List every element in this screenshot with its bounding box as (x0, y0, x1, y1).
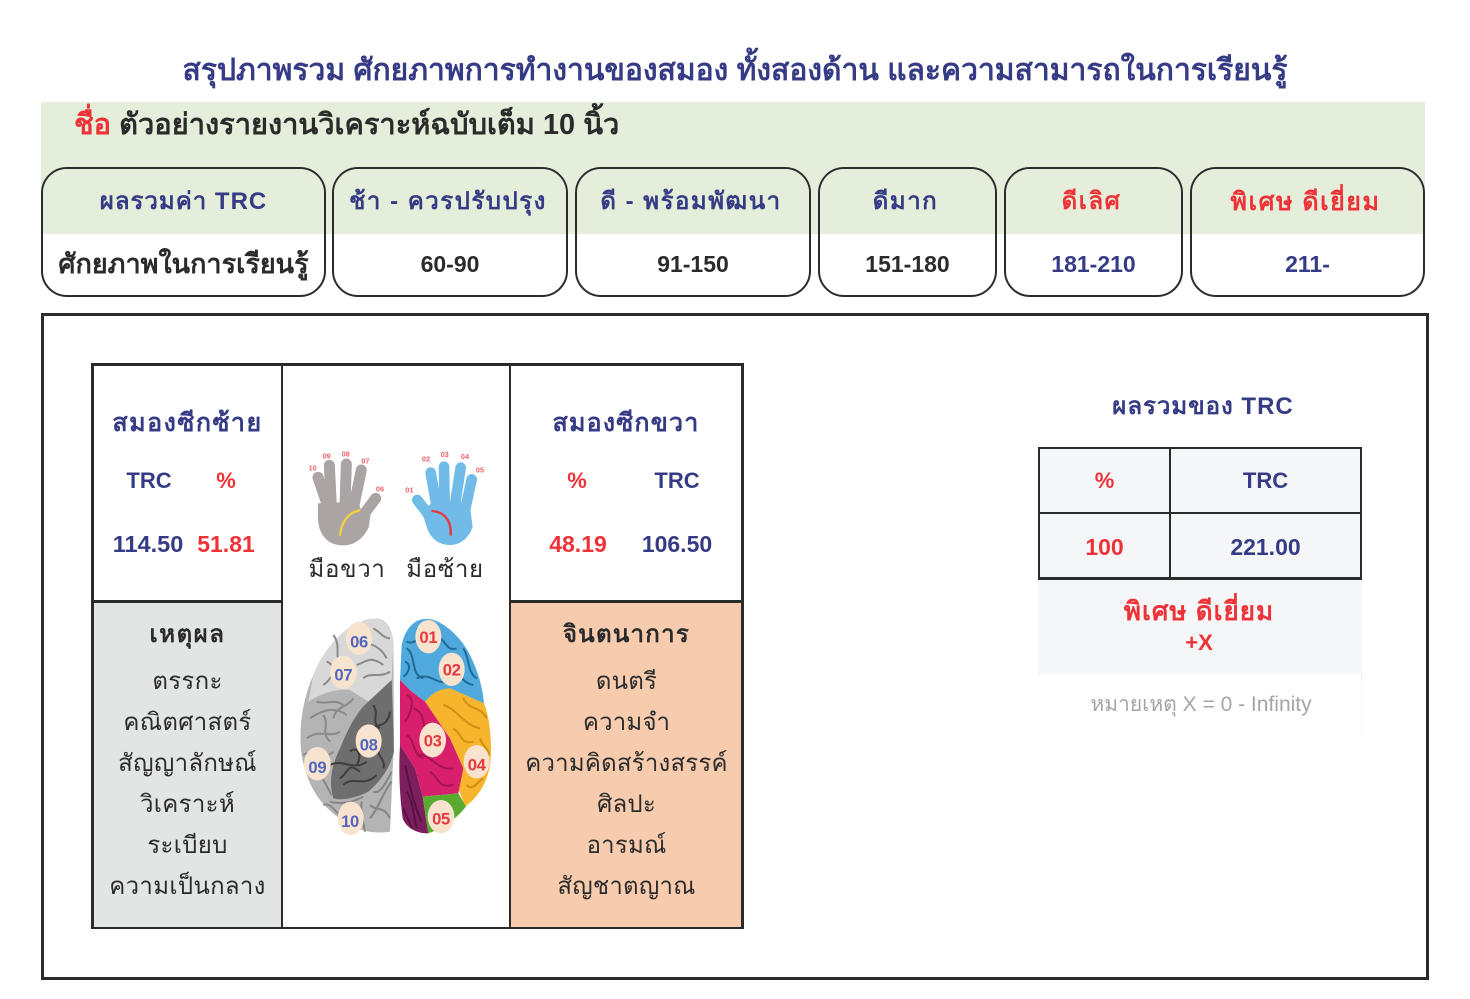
card: good (575, 167, 811, 297)
imagination list (525, 621, 728, 900)
card: very good: ดีมาก (873, 188, 938, 215)
logic heading: เหตุผล (150, 621, 225, 648)
brain number badges: 01 (419, 628, 437, 647)
left TRC label: TRC (126, 468, 172, 493)
card: very good: 151-180 (865, 251, 950, 277)
left brain heading: สมองซีกซ้าย (112, 409, 263, 437)
icon: left hand: 05 (476, 465, 484, 474)
card: good: 91-150 (657, 251, 729, 277)
brain number badges: 02 (443, 660, 461, 679)
logic items: ตรรกะ (152, 668, 223, 695)
brain number badges (304, 620, 490, 835)
TRC label: TRC (1243, 468, 1288, 493)
icon: left hand: 03 (441, 450, 449, 459)
logic list (109, 621, 266, 900)
imagination items: ความคิดสร้างสรรค์ (525, 750, 728, 777)
card: total TRC: ศักยภาพในการเรียนรู้ (58, 249, 309, 279)
brain number badges: 05 (432, 810, 450, 829)
icon: right hand (309, 450, 384, 545)
hand label: right: มือขวา (308, 556, 386, 583)
main panel (41, 313, 1429, 980)
card: good: ดี - พร้อมพัฒนา (600, 188, 782, 215)
icon: left hand: 04 (461, 452, 470, 461)
logic panel (94, 602, 281, 927)
brain number badges: 09 (308, 758, 326, 777)
footnote edge (1361, 674, 1362, 736)
icon: left hand: 01 (405, 486, 413, 495)
right brain heading: สมองซีกขวา (552, 409, 700, 437)
card: excellent: ดีเลิศ (1062, 188, 1121, 215)
card: slow: 60-90 (421, 251, 479, 277)
card: total TRC (41, 167, 326, 297)
hand label: left: มือซ้าย (406, 556, 484, 583)
total table (1038, 447, 1362, 580)
card: slow (332, 167, 568, 297)
imagination items: ความจำ (583, 709, 670, 736)
percent total: 100 (1085, 534, 1124, 560)
brain right hemisphere (399, 619, 491, 833)
right percent label: % (567, 468, 587, 493)
logic items: ความเป็นกลาง (109, 873, 266, 900)
logic items: คณิตศาสตร์ (123, 709, 252, 736)
icon: right hand: 08 (342, 450, 350, 459)
imagination items: ศิลปะ (597, 791, 656, 818)
header band (41, 102, 1425, 234)
result text: พิเศษ ดีเยี่ยม (1124, 596, 1274, 626)
card: special: 211- (1285, 251, 1330, 277)
table lines (281, 366, 283, 927)
icon: hands (309, 450, 484, 546)
imagination heading: จินตนาการ (563, 621, 690, 648)
title: สรุปภาพรวม ศักยภาพการทำงานของสมอง ทั้งสองด้าน และความสามารถในการเรียนรู้ (183, 54, 1287, 87)
TRC total heading: ผลรวมของ TRC (1112, 393, 1294, 420)
card: very good (818, 167, 997, 297)
icon: brain (300, 618, 492, 835)
right TRC value: 106.50 (642, 531, 712, 557)
right percent value: 48.19 (549, 531, 607, 557)
percent label: % (1095, 468, 1114, 493)
brain number badges: 07 (334, 665, 352, 684)
brain number badges: 03 (424, 731, 442, 750)
card: special: พิเศษ ดีเยี่ยม (1231, 188, 1380, 216)
card: total TRC: ผลรวมค่า TRC (100, 188, 267, 215)
name line: ชื่อ ตัวอย่างรายงานวิเคราะห์ฉบับเต็ม 10 นิ้ว (74, 109, 619, 141)
imagination items: สัญชาตญาณ (557, 873, 696, 900)
plus X: +X (1185, 630, 1213, 655)
brain number badges: 06 (350, 633, 368, 652)
left TRC value: 114.50 (113, 531, 183, 557)
brain number badges: 08 (360, 735, 378, 754)
imagination panel (511, 602, 741, 927)
imagination items (525, 668, 728, 900)
brain number badges: 10 (341, 812, 359, 831)
card: excellent: 181-210 (1051, 251, 1136, 277)
logic items: ระเบียบ (147, 832, 228, 859)
right TRC label: TRC (654, 468, 700, 493)
logic items: สัญญาลักษณ์ (118, 750, 257, 777)
left brain stats (112, 409, 263, 557)
icon: left hand: 02 (422, 455, 430, 464)
brain number badges: 04 (468, 755, 487, 774)
card: slow: ช้า - ควรปรับปรุง (349, 188, 547, 215)
card: special (1190, 167, 1425, 297)
footnote: หมายเหตุ X = 0 - Infinity (1090, 693, 1312, 716)
TRC total: 221.00 (1230, 534, 1301, 560)
left percent value: 51.81 (197, 531, 255, 557)
logic items (109, 668, 266, 900)
imagination items: ดนตรี (596, 668, 657, 695)
logic items: วิเคราะห์ (140, 791, 235, 818)
result box (1038, 580, 1362, 674)
card: excellent (1004, 167, 1183, 297)
icon: right hand: 06 (376, 485, 384, 494)
imagination items: อารมณ์ (587, 832, 666, 859)
icon: right hand: 07 (361, 457, 369, 466)
icon: right hand: 10 (309, 464, 317, 473)
brain left hemisphere (300, 618, 394, 833)
right brain stats (549, 409, 712, 557)
brain table (91, 363, 744, 929)
left percent label: % (216, 468, 236, 493)
icon: left hand (405, 450, 484, 545)
icon: right hand: 09 (323, 452, 331, 461)
